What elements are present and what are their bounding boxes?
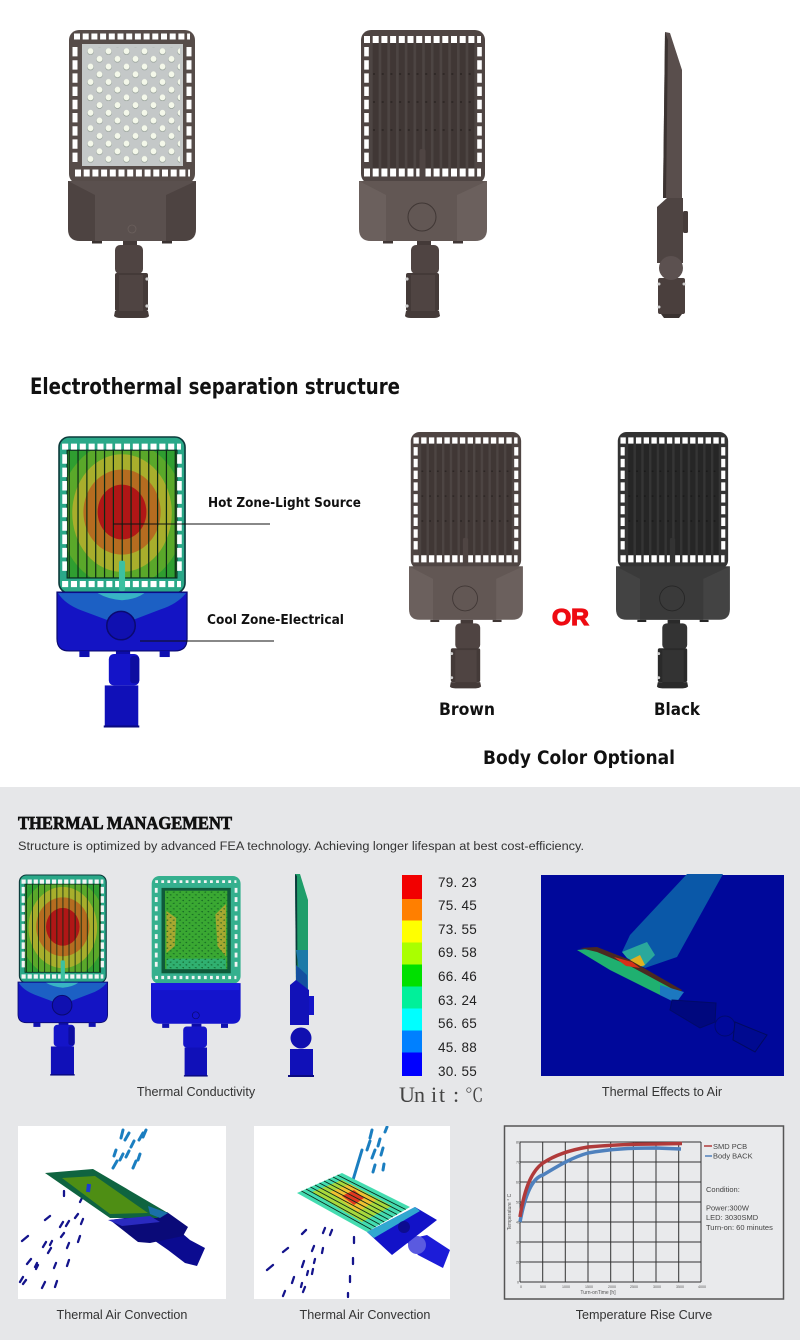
intro text: Structure is optimized by advanced FEA technology. Achieving longer lifespan at best cost-efficiency. — [18, 841, 584, 853]
test conditions: Power:300W — [706, 1204, 750, 1212]
heading: electrothermal: Electrothermal separation structure — [30, 375, 400, 400]
axis labels: 40 — [516, 1220, 520, 1224]
unit: Unit: — [399, 1082, 459, 1107]
caption: rise curve: Temperature Rise Curve — [576, 1308, 712, 1322]
axis labels: 0 — [520, 1285, 522, 1289]
section background: thermal management — [0, 787, 800, 1340]
thermal lamp diagram — [57, 437, 187, 728]
scale values: 69. 58 — [438, 945, 477, 960]
axis labels: 2000 — [608, 1285, 616, 1289]
chart legend: Body BACK — [713, 1152, 753, 1160]
air thermal simulation — [541, 874, 784, 1076]
product view: LED front — [68, 30, 196, 318]
axis labels: 50 — [516, 1200, 520, 1204]
thermal view: back — [18, 875, 108, 1076]
callout: hot zone: Hot Zone-Light Source — [208, 495, 361, 511]
scale values: 56. 65 — [438, 1016, 477, 1031]
callout: cool zone: Cool Zone-Electrical — [207, 612, 344, 628]
caption: thermal effects: Thermal Effects to Air — [602, 1085, 722, 1099]
axis labels: 30 — [516, 1240, 520, 1244]
curve: body back — [520, 1148, 681, 1222]
brown lamp option — [409, 432, 523, 688]
heading: thermal management: THERMAL MANAGEMENT — [18, 813, 232, 833]
axis labels: 60 — [516, 1180, 520, 1184]
axis labels: 80 — [516, 1140, 520, 1144]
axis labels: 70 — [516, 1160, 520, 1164]
test conditions — [706, 1185, 773, 1232]
scale values: 30. 55 — [438, 1064, 477, 1079]
scale values — [438, 875, 477, 1079]
axis labels: 1500 — [585, 1285, 593, 1289]
plot grid — [520, 1142, 701, 1282]
axis labels: 20 — [516, 1260, 520, 1264]
axis labels: Turn-onTime [h] — [580, 1290, 616, 1296]
test conditions: Turn-on: 60 minutes — [706, 1223, 773, 1232]
thermal view: LED front — [151, 876, 241, 1077]
axis labels: Temperature ° C — [507, 1193, 513, 1230]
product view: side profile — [657, 32, 688, 318]
test conditions: LED: 3030SMD — [706, 1213, 759, 1222]
axis labels: 2500 — [630, 1285, 638, 1289]
axis labels: 0 — [517, 1280, 519, 1284]
caption: convection left: Thermal Air Convection — [57, 1308, 187, 1322]
scale values: 63. 24 — [438, 993, 477, 1008]
axis labels: 500 — [540, 1285, 546, 1289]
rising air arrows — [113, 1130, 146, 1168]
scale values: 45. 88 — [438, 1040, 477, 1055]
temperature legend — [399, 875, 484, 1108]
convection image: finned side — [254, 1126, 450, 1299]
black lamp option — [616, 432, 730, 688]
caption: thermal conductivity: Thermal Conductivity — [137, 1085, 256, 1099]
scale values: 79. 23 — [438, 875, 477, 890]
color scale bar — [402, 875, 422, 1076]
label: black: Black — [654, 700, 701, 719]
axis labels: 4000 — [698, 1285, 706, 1289]
caption: convection right: Thermal Air Convection — [300, 1308, 430, 1322]
axis labels — [507, 1140, 706, 1296]
test conditions: Condition: — [706, 1185, 740, 1194]
section background: white — [0, 0, 800, 787]
curve: SMD PCB — [520, 1144, 682, 1217]
chart legend: SMD PCB — [713, 1142, 747, 1151]
axis labels: 3000 — [653, 1285, 661, 1289]
scale values: 75. 45 — [438, 898, 477, 913]
thermal view: side — [288, 874, 314, 1077]
scale values: 73. 55 — [438, 922, 477, 937]
axis labels: 3500 — [676, 1285, 684, 1289]
product view: finned back — [359, 30, 487, 318]
chart legend — [704, 1142, 753, 1160]
axis labels: 1000 — [562, 1285, 570, 1289]
OR label: OR — [552, 604, 589, 630]
heading: body color optional: Body Color Optional — [483, 748, 675, 769]
convection image: LED side — [18, 1126, 226, 1299]
label: brown: Brown — [439, 700, 495, 719]
unit: ℃ — [465, 1082, 484, 1108]
rising air arrows — [352, 1126, 389, 1180]
scale values: 66. 46 — [438, 969, 477, 984]
chart: temperature rise curve — [504, 1126, 784, 1299]
